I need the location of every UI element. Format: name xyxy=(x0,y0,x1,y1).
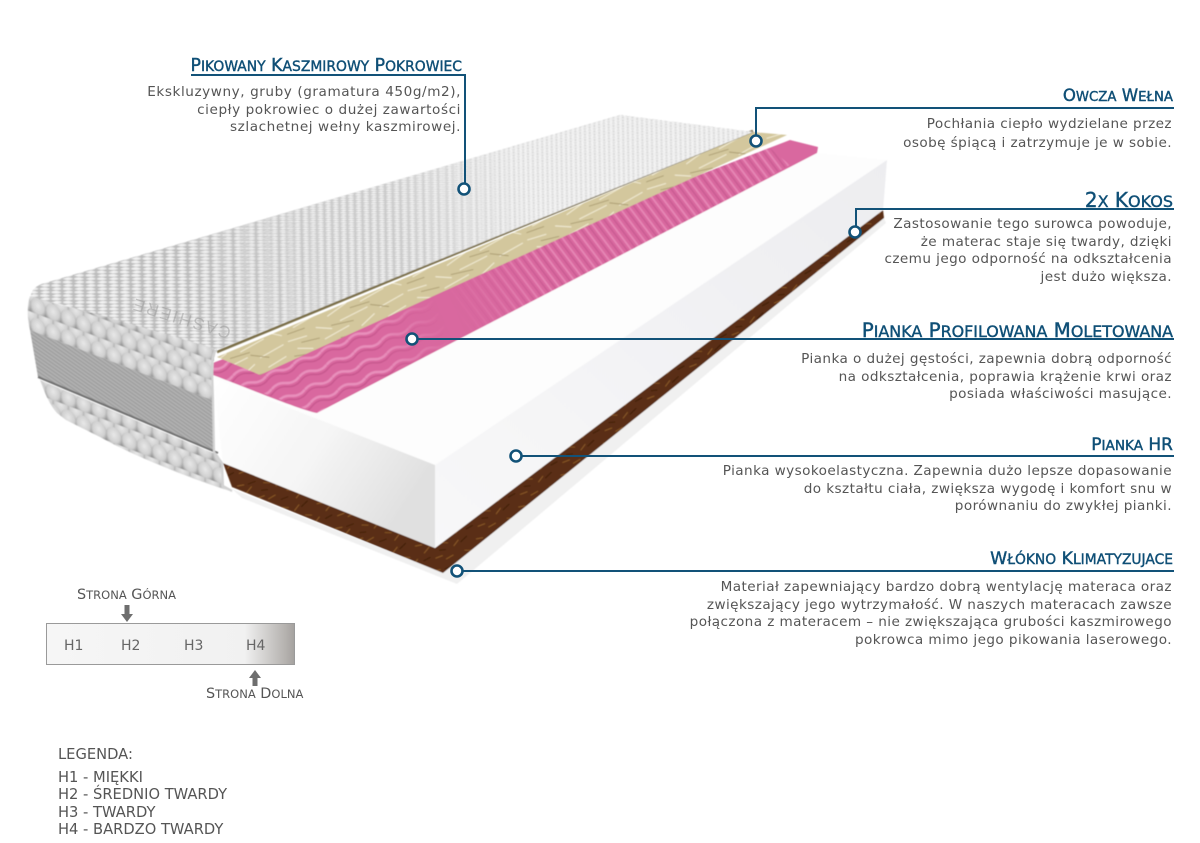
leader: coconut xyxy=(850,209,1174,238)
text: coconut: Zastosowanie tego surowca powoduje, xyxy=(893,216,1172,232)
text: sheep wool xyxy=(903,116,1172,150)
heading: cashmere cover: PIKOWANY KASZMIROWY POKROWIEC xyxy=(190,56,462,76)
text: coconut: jest dużo większa. xyxy=(1041,269,1172,285)
text: cashmere cover: szlachetnej wełny kaszmirowej. xyxy=(230,119,461,135)
heading: climate fibre: WŁÓKNO KLIMATYZUJACE xyxy=(990,549,1173,569)
cover side band xyxy=(30,330,218,453)
text: cashmere cover: Ekskluzywny, gruby (gramatura 450g/m2), xyxy=(147,84,461,100)
text: cashmere cover xyxy=(147,84,461,135)
base layer under the mattress xyxy=(232,218,886,584)
legend: H4 - BARDZO TWARDY xyxy=(58,821,223,838)
layer: sheep wool xyxy=(217,131,787,375)
text: profiled foam xyxy=(801,351,1172,402)
layer: coconut fibre xyxy=(223,210,884,573)
leader: cashmere cover xyxy=(191,75,470,194)
text: profiled foam: Pianka o dużej gęstości, zapewnia dobrą odporność xyxy=(801,351,1172,367)
firmness scale bar: H2 xyxy=(121,638,140,654)
legend: H2 - ŚREDNIO TWARDY xyxy=(58,786,227,803)
legend: H1 - MIĘKKI xyxy=(58,769,143,786)
text: climate fibre: pokrowca mimo jego pikowania laserowego. xyxy=(855,632,1172,648)
label: lower side: STRONA DOLNA xyxy=(206,686,303,702)
text: HR foam: do kształtu ciała, zwiększa wygodę i komfort snu w xyxy=(804,481,1172,497)
text: cashmere cover: ciepły pokrowiec o dużej zawartości xyxy=(197,102,461,118)
text: HR foam xyxy=(723,463,1172,514)
text: sheep wool: Pochłania ciepło wydzielane przez xyxy=(927,116,1172,132)
heading: profiled foam: PIANKA PROFILOWANA MOLETOWANA xyxy=(862,319,1173,342)
text: HR foam: porównaniu do zwykłej pianki. xyxy=(955,498,1172,514)
quilted cover: top surface xyxy=(30,114,754,350)
heading: HR foam: PIANKA HR xyxy=(1091,435,1173,455)
text: profiled foam: na odkształcenia, poprawia krążenie krwi oraz xyxy=(839,369,1172,385)
text: climate fibre: połączona z materacem – nie zwiększająca grubości kaszmirowego xyxy=(690,614,1172,630)
layer: HR foam xyxy=(213,153,887,548)
label: upper side: STRONA GÓRNA xyxy=(77,587,176,603)
text: profiled foam: posiada właściwości masujące. xyxy=(949,386,1172,402)
heading: coconut: 2X KOKOS xyxy=(1085,188,1173,212)
firmness scale bar xyxy=(46,623,295,665)
firmness scale bar: H3 xyxy=(184,638,203,654)
mattress illustration xyxy=(27,114,887,584)
leader: HR foam xyxy=(510,450,1174,462)
icon: down arrow xyxy=(121,605,133,622)
legend: H3 - TWARDY xyxy=(58,804,155,821)
text: climate fibre xyxy=(690,579,1172,648)
quilted cover: upper front xyxy=(28,296,216,400)
legend: LEGENDA: xyxy=(58,746,133,763)
cover logo imprint: CASHIERE xyxy=(129,294,233,342)
text: sheep wool: osobę śpiącą i zatrzymuje je w sobie. xyxy=(903,134,1172,150)
text: climate fibre: zwiększający jego wytrzymałość. W naszych materacach zawsze xyxy=(707,597,1172,613)
icon: up arrow xyxy=(249,670,261,686)
leader: climate fibre xyxy=(452,566,1174,576)
text: coconut xyxy=(884,216,1172,285)
firmness scale bar: H1 xyxy=(64,638,83,654)
quilted cover: lower front xyxy=(40,380,233,492)
leader: profiled foam xyxy=(406,334,1174,344)
layer: profiled pink foam xyxy=(200,130,830,420)
text: coconut: że materac staje się twardy, dzięki xyxy=(921,234,1172,250)
leader: sheep wool xyxy=(750,108,1174,146)
firmness scale bar: H4 xyxy=(246,638,265,654)
heading: sheep wool: OWCZA WEŁNA xyxy=(1063,86,1173,105)
legend xyxy=(58,746,228,838)
text: climate fibre: Materiał zapewniający bardzo dobrą wentylację materaca oraz xyxy=(721,579,1172,595)
cover fold edge xyxy=(212,350,232,491)
text: HR foam: Pianka wysokoelastyczna. Zapewnia dużo lepsze dopasowanie xyxy=(723,463,1172,479)
text: coconut: czemu jego odporność na odkształcenia xyxy=(884,251,1172,267)
